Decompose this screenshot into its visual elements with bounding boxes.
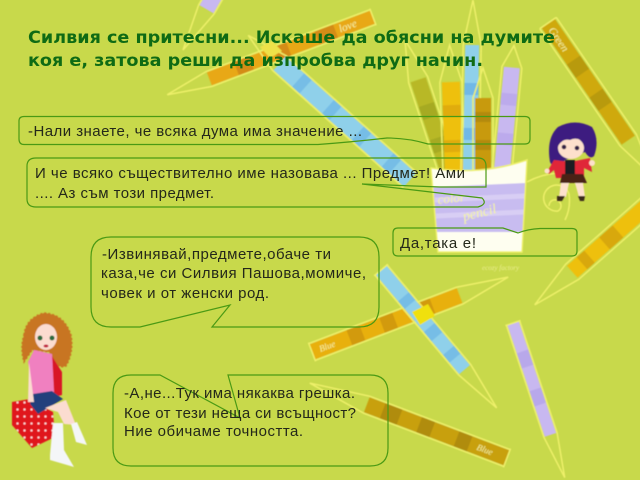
pencil: blue diagonal <box>242 28 417 187</box>
pink top <box>28 350 54 396</box>
boots <box>50 423 74 467</box>
pencil: brown <box>473 68 493 170</box>
callout: noun names an object <box>27 158 486 207</box>
callout: there is a mistake: -А,не...Тук има някаква грешка. <box>124 385 355 402</box>
cup: pencil <box>460 202 498 225</box>
swirl decoration <box>527 173 570 220</box>
cup <box>431 160 527 272</box>
blue skirt <box>30 391 63 414</box>
hair <box>22 313 72 367</box>
pencil: orange blue label <box>308 268 512 361</box>
callout: sorry, object: човек и от женски род. <box>101 285 269 302</box>
callout: there is a mistake: Ние обичаме точността. <box>124 423 303 440</box>
pencil: green label: Green <box>546 25 571 55</box>
pencil: blue lower <box>374 264 504 414</box>
callout: sorry, object: каза,че си Силвия Пашова,момиче, <box>101 265 366 282</box>
character: purple-haired girl <box>544 122 597 201</box>
pencil: gold lower: Blue <box>475 442 494 457</box>
red scarf <box>50 353 62 398</box>
pencil: bottom right yellow <box>528 197 640 312</box>
title <box>28 28 555 70</box>
callout: noun names an object: .... Аз съм този предмет. <box>35 185 214 202</box>
callout: sorry, object: -Извинявай,предмете,обаче ти <box>102 246 331 263</box>
character: red-haired girl on a polka-dot cube <box>12 313 87 467</box>
pencil artwork <box>164 0 640 480</box>
callout: every word has meaning <box>19 116 530 144</box>
callout: there is a mistake: Кое от тези неща си всъщност? <box>124 405 356 422</box>
pencil: cup purple <box>492 45 524 171</box>
arm and legs <box>28 362 34 402</box>
callout: there is a mistake <box>113 375 388 466</box>
title: коя е, затова реши да изпробва друг начин. <box>28 51 483 70</box>
title: Силвия се притесни... Искаше да обясни на думите <box>28 28 555 47</box>
pencil: orange love <box>164 9 376 103</box>
yellow crossing highlight <box>260 41 282 58</box>
pencil: gold lower <box>306 374 511 467</box>
callout: sorry, object <box>91 237 379 327</box>
pencil: orange love: love <box>337 18 359 35</box>
callout: noun names an object: И че всяко съществително име назовава ... Предмет! Ами <box>35 165 465 182</box>
callout: that is right <box>393 228 577 256</box>
callout: every word has meaning: -Нали знаете, че всяка дума има значение ... <box>28 123 362 140</box>
pencil: purple lower <box>505 320 572 480</box>
pencil: green label <box>540 17 640 183</box>
crossing highlight <box>412 304 435 325</box>
cup label: color <box>437 189 467 207</box>
pencil: yellow <box>439 45 465 172</box>
cube <box>12 399 55 448</box>
pencil: olive <box>395 37 457 173</box>
pencil: orange blue label: Blue <box>318 339 337 354</box>
pencil: tall blue <box>461 0 482 170</box>
small credit: ecozy factory <box>482 264 520 272</box>
face <box>35 324 57 350</box>
pencils in cup <box>395 0 524 173</box>
pencil: purple top <box>175 0 244 54</box>
callout: that is right: Да,така е! <box>400 235 476 252</box>
